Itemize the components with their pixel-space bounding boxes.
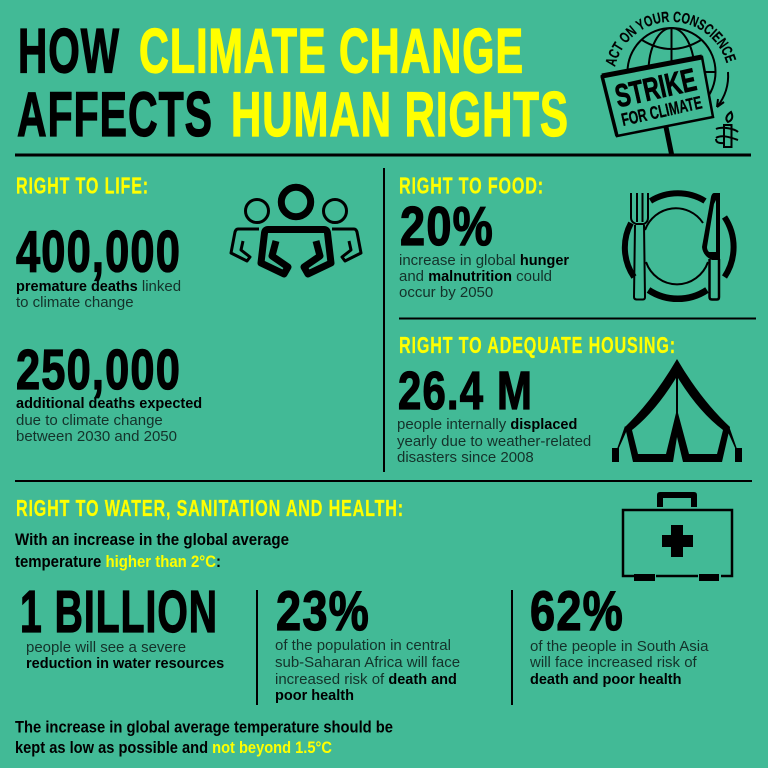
logo: strike for climate — [600, 12, 739, 154]
icon: tent — [612, 359, 742, 462]
curved slogan: ACT ON YOUR CONSCIENCE — [606, 12, 736, 67]
stat: 26.4 M: 26.4 M — [398, 361, 533, 421]
icon: first aid kit — [623, 492, 732, 581]
stat: 400,000: to climate change — [16, 294, 134, 311]
description: yearly due to weather-related — [397, 433, 591, 450]
stat: 250,000: 250,000 — [16, 338, 181, 402]
stat: 20%: 20% — [400, 195, 494, 257]
title: AFFECTS — [17, 80, 213, 150]
stat: 250,000 — [16, 338, 202, 445]
stat: 250,000: due to climate change — [16, 412, 163, 429]
description: people internally displaced — [397, 416, 577, 433]
stat: 23%: sub-Saharan Africa will face — [275, 654, 460, 671]
stat: 23%: poor health — [275, 688, 354, 704]
icon: amnesty candle — [716, 112, 738, 147]
panel: right to food — [399, 172, 734, 301]
icon: people — [231, 187, 361, 274]
panel: right to life — [16, 172, 361, 445]
stat: 250,000: between 2030 and 2050 — [16, 428, 177, 445]
closing statement: kept as low as possible and not beyond 1.5°C — [15, 739, 332, 757]
title: HOW — [18, 16, 120, 86]
stat: 400,000: premature deaths linked — [16, 278, 181, 295]
sign: STRIKE — [612, 61, 700, 114]
heading: RIGHT TO FOOD: — [399, 172, 544, 198]
stat: 1 billion — [20, 579, 224, 672]
description: occur by 2050 — [399, 284, 493, 301]
stat: 62%: of the people in South Asia — [530, 638, 709, 655]
heading: RIGHT TO LIFE: — [16, 172, 149, 198]
closing statement — [15, 718, 393, 757]
panel: right to water, sanitation and health — [15, 492, 732, 757]
stat: 23%: increased risk of death and — [275, 671, 457, 688]
title: CLIMATE CHANGE — [139, 16, 524, 86]
title — [17, 16, 569, 150]
stat: 400,000: 400,000 — [16, 220, 181, 284]
globe — [628, 28, 728, 116]
stat: 23%: of the population in central — [275, 637, 451, 654]
intro text — [15, 531, 289, 571]
description: and malnutrition could — [399, 268, 552, 285]
stat: 1 billion: 1 BILLION — [20, 579, 218, 645]
stat: 62% — [529, 579, 709, 688]
sign: FOR CLIMATE — [619, 92, 704, 130]
heading: RIGHT TO WATER, SANITATION AND HEALTH: — [16, 495, 404, 521]
panel: right to adequate housing — [397, 332, 742, 466]
stat: 23% — [275, 579, 460, 704]
stat: 62%: 62% — [530, 579, 624, 642]
stat: 1 billion: people will see a severe — [26, 639, 186, 656]
icon: plate, fork and knife — [625, 193, 734, 300]
stat: 23%: 23% — [276, 579, 370, 642]
intro text: With an increase in the global average — [15, 531, 289, 549]
stat: 62%: will face increased risk of — [529, 654, 698, 671]
stat: 1 billion: reduction in water resources — [26, 656, 224, 672]
sign — [602, 57, 713, 154]
stat: 62%: death and poor health — [530, 672, 681, 688]
stat: 250,000: additional deaths expected — [16, 396, 202, 412]
stat: 400,000 — [16, 220, 181, 311]
description: increase in global hunger — [399, 252, 569, 269]
title: HUMAN RIGHTS — [231, 80, 569, 150]
intro text: temperature higher than 2°C: — [15, 553, 221, 571]
closing statement: The increase in global average temperature should be — [15, 718, 393, 736]
description — [397, 416, 591, 466]
description — [399, 252, 569, 301]
description: disasters since 2008 — [397, 449, 534, 466]
